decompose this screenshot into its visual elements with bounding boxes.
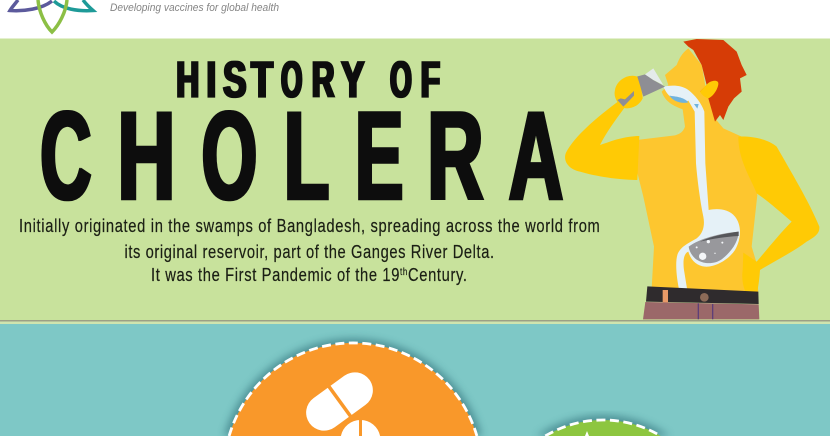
- intro line 3: Century.: [408, 264, 467, 285]
- heading: history of: [176, 51, 440, 109]
- belt loop: [663, 290, 668, 303]
- illustration: man drinking contaminated water: [565, 39, 819, 319]
- belt: [646, 286, 759, 304]
- heading: history of: O: [281, 51, 302, 108]
- bubbles: [696, 240, 723, 260]
- heading: cholera: L: [284, 86, 329, 225]
- intro line 3: It was the First Pandemic of the 19: [151, 264, 399, 285]
- heading: cholera: [40, 86, 563, 226]
- panel: teal section: [0, 324, 830, 436]
- trousers: [643, 302, 759, 319]
- icon: tablet: [341, 418, 380, 436]
- fingers gap: [617, 91, 634, 107]
- digestive tract: [663, 86, 740, 291]
- logo: [10, 0, 93, 32]
- heading: cholera: O: [202, 86, 257, 226]
- water drop: [694, 104, 699, 109]
- heading: history of: I: [207, 52, 216, 109]
- heading: history of: H: [176, 52, 199, 108]
- belt buckle: [700, 293, 709, 302]
- heading: history of: F: [421, 52, 440, 108]
- intro text: [19, 215, 600, 285]
- intro line 1: Initially originated in the swamps of Bangladesh, spreading across the world from: [19, 215, 600, 236]
- trouser fly: [698, 303, 713, 319]
- man: raised arm: [565, 101, 639, 180]
- heading: cholera: A: [509, 86, 563, 225]
- heading: cholera: E: [355, 86, 403, 226]
- heading: history of: O: [390, 51, 412, 108]
- man: hair: [683, 39, 747, 122]
- tagline: Developing vaccines for global health: [110, 2, 279, 14]
- heading: history of: S: [223, 53, 246, 109]
- glass: [637, 68, 665, 97]
- intro line 3: th: [400, 266, 407, 277]
- logo: teal petal: [54, 0, 93, 11]
- heading: history of: Y: [341, 53, 364, 109]
- heading: cholera: C: [40, 86, 91, 226]
- green circle: [536, 415, 670, 436]
- man: ear: [700, 81, 718, 98]
- stomach liquid surface: [700, 232, 739, 242]
- stomach contents: [689, 232, 739, 263]
- water in mouth: [669, 96, 688, 103]
- orange circle: [224, 338, 482, 436]
- logo: green leaf: [38, 0, 67, 32]
- icon tip: [585, 431, 589, 436]
- heading: history of: R: [312, 51, 334, 108]
- panel: green header: [0, 38, 830, 324]
- heading: cholera: H: [117, 87, 175, 226]
- icon: capsule: [298, 364, 381, 436]
- heading: history of: T: [251, 52, 273, 109]
- intro line 2: its original reservoir, part of the Ganges River Delta.: [124, 241, 494, 262]
- man: torso and head: [635, 48, 758, 293]
- logo: purple petal: [10, 0, 52, 11]
- hand: [615, 76, 643, 108]
- man: hand on hip arm: [738, 137, 819, 301]
- heading: cholera: R: [427, 87, 484, 226]
